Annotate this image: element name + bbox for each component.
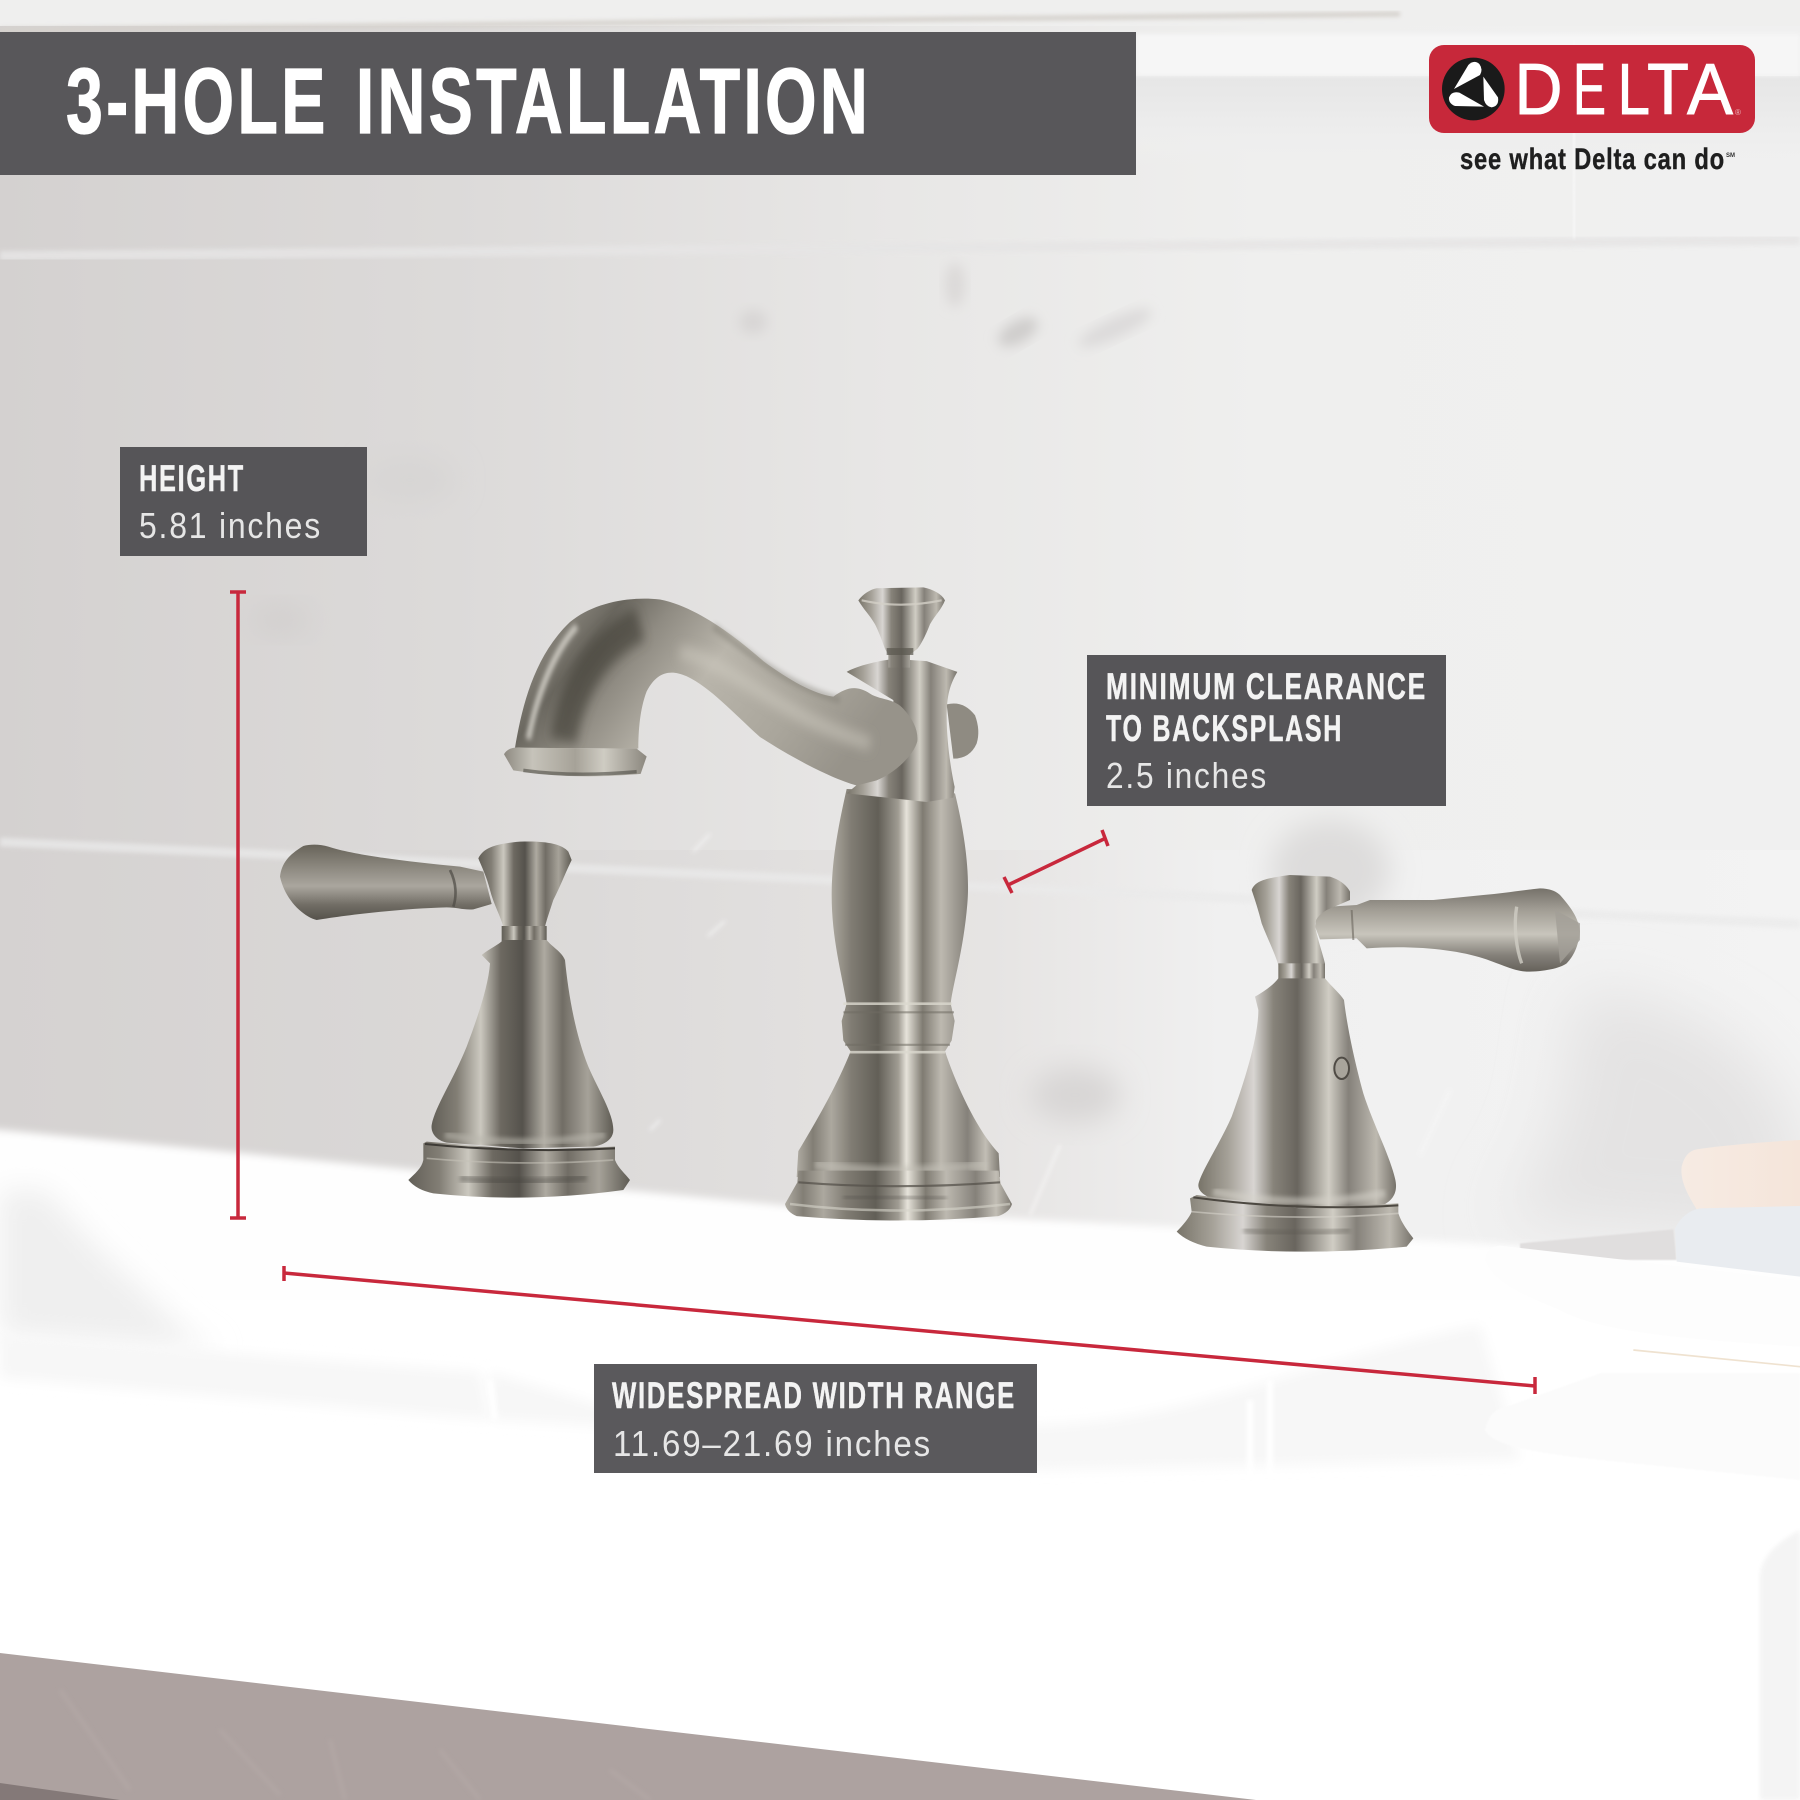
callout: minimum clearance: TO BACKSPLASH	[1106, 708, 1343, 749]
callout: minimum clearance	[1087, 655, 1446, 806]
background: marble tile wall	[0, 0, 1800, 1300]
title banner	[0, 32, 1136, 175]
arrow: clearance dimension	[1004, 830, 1108, 893]
service mark: SM	[1726, 153, 1735, 159]
back lever knob	[947, 703, 978, 759]
icon: Delta triangle mark	[1442, 58, 1505, 120]
left body	[432, 940, 613, 1148]
sink and countertop	[0, 1124, 1800, 1800]
left base	[408, 1142, 630, 1198]
callout: minimum clearance: MINIMUM CLEARANCE	[1106, 666, 1427, 707]
left lever	[280, 845, 492, 920]
lower body	[797, 789, 1000, 1177]
arrow: width dimension	[284, 1266, 1535, 1394]
registered mark: ®	[1735, 108, 1741, 117]
wood vanity	[0, 1653, 1256, 1800]
wordmark: E	[1573, 50, 1606, 130]
right lever	[1315, 888, 1580, 972]
callout: widespread width range	[594, 1364, 1037, 1473]
callout: minimum clearance: 2.5 inches	[1106, 755, 1268, 796]
right side accessories: soap, jar and dish	[1485, 1140, 1800, 1480]
faucet: center spout body	[504, 587, 1012, 1220]
faucet: left handle	[280, 841, 630, 1198]
icon: soap dish	[1485, 1246, 1800, 1347]
faucet: right handle	[1177, 875, 1580, 1252]
left cap	[478, 841, 572, 927]
spout rim	[504, 747, 647, 776]
callout: widespread width range: 11.69–21.69 inches	[613, 1423, 932, 1464]
right base	[1177, 1195, 1413, 1252]
right cap	[1252, 875, 1350, 965]
spout shading	[563, 624, 640, 741]
spout	[515, 599, 917, 786]
wordmark: T	[1647, 50, 1689, 130]
logo: Delta	[1429, 45, 1755, 176]
upper collar	[847, 659, 957, 802]
base ring	[785, 1171, 1012, 1220]
arrow: height dimension	[230, 592, 246, 1218]
top knob	[858, 587, 945, 668]
wordmark: L	[1618, 50, 1650, 130]
icon: soap jar	[1675, 1206, 1800, 1277]
right body	[1198, 978, 1396, 1208]
title text: 3-HOLE INSTALLATION	[66, 49, 871, 153]
wordmark: D	[1514, 50, 1562, 130]
wordmark: A	[1687, 50, 1733, 130]
tagline: see what Delta can do	[1460, 143, 1725, 176]
callout: height: 5.81 inches	[139, 505, 322, 546]
icon: soap bar	[1681, 1140, 1800, 1210]
callout: height	[120, 447, 367, 556]
wordmark	[1514, 50, 1733, 130]
diverter hole	[1334, 1058, 1349, 1079]
callout: height: HEIGHT	[139, 458, 245, 499]
callout: widespread width range: WIDESPREAD WIDTH RANGE	[612, 1375, 1016, 1416]
